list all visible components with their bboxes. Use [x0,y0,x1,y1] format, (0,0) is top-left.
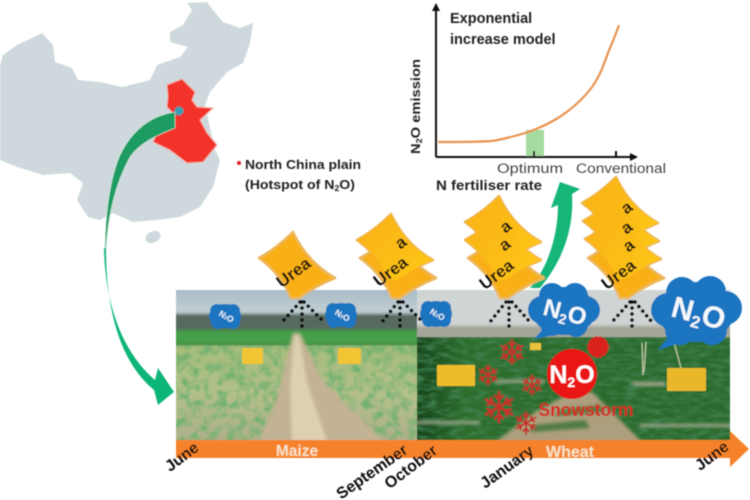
large N2O cloud [651,276,742,350]
urea bag 4: a [617,217,637,238]
large N2O cloud: N [668,291,697,328]
small N2O cloud 1 [209,304,241,329]
map annotation: North China plain: 2 [334,184,340,193]
red N2O burst: 2 [567,374,575,390]
urea bag 3: Urea [476,255,518,294]
map annotation: North China plain: O) [339,177,355,192]
y axis label: O emission [408,59,423,138]
axis arrowheads [432,3,638,161]
small N2O cloud 1: N2O [217,308,236,325]
urea bag 2: a [391,232,411,253]
highlighted region: North China plain [153,79,217,163]
urea bag 4: Urea [598,255,640,294]
axes [436,8,634,157]
green arrow up to chart [530,182,580,288]
small N2O cloud 3 [420,301,452,327]
x axis label: N fertiliser rate [436,178,543,193]
photo: maize field [175,290,418,441]
large N2O cloud: O [698,299,729,337]
red N2O burst: N [549,361,567,389]
urea bag 3 [465,196,544,298]
snowflakes [479,340,541,434]
crop label: Wheat: Wheat [546,444,595,461]
urea bag 2: Urea [370,252,412,291]
urea bag 1: Urea [273,253,315,292]
spread dots 1 [283,302,323,328]
small N2O cloud 3: N2O [428,306,447,323]
chart: exponential increase model [408,3,666,193]
map annotation: North China plain: North China plain [245,157,361,172]
green curved arrow from map to field [104,112,175,405]
y axis label: 2 [415,138,424,143]
map of China [0,2,253,245]
small N2O cloud 2 [325,303,357,328]
medium N2O cloud: O [565,301,590,331]
x tick: optimum: Optimum [497,161,563,176]
urea bag 4: a [619,235,639,256]
spread dots 4 [612,302,652,328]
medium N2O cloud: N [540,294,564,325]
urea bag 3: a [495,234,515,255]
month: June end: June [692,438,732,474]
x tick: conventional: Conventional [576,161,666,176]
month: June: June [162,439,202,475]
medium N2O cloud [528,283,600,339]
map annotation: North China plain: (Hotspot of N [245,177,327,192]
y axis label: N [408,145,423,154]
optimum band [526,130,544,157]
red N2O burst: O [575,361,595,389]
chart title: Exponential [450,11,532,27]
snowstorm label: Snowstorm [538,400,634,420]
month: October: October [382,442,441,493]
location marker [174,106,184,116]
chart title: increase model [450,32,556,48]
urea bag 4 [582,177,664,298]
photo: wheat field [416,289,731,441]
large N2O cloud: 2 [688,312,702,333]
crop label: Maize: Maize [276,443,318,460]
urea bag 1 [259,232,335,298]
map annotation: North China plain [237,157,361,193]
timeline arrow [176,431,749,467]
emission curve [438,25,619,142]
spread dots 3 [490,302,530,328]
small N2O cloud 2: N2O [333,307,352,324]
spread dots 2 [382,302,420,328]
urea bag 4: a [617,197,637,218]
medium N2O cloud: 2 [557,310,569,328]
urea bag 2 [357,214,436,298]
month: January: January [478,442,537,492]
urea bag 3: a [496,216,516,237]
red N2O burst [547,337,608,399]
